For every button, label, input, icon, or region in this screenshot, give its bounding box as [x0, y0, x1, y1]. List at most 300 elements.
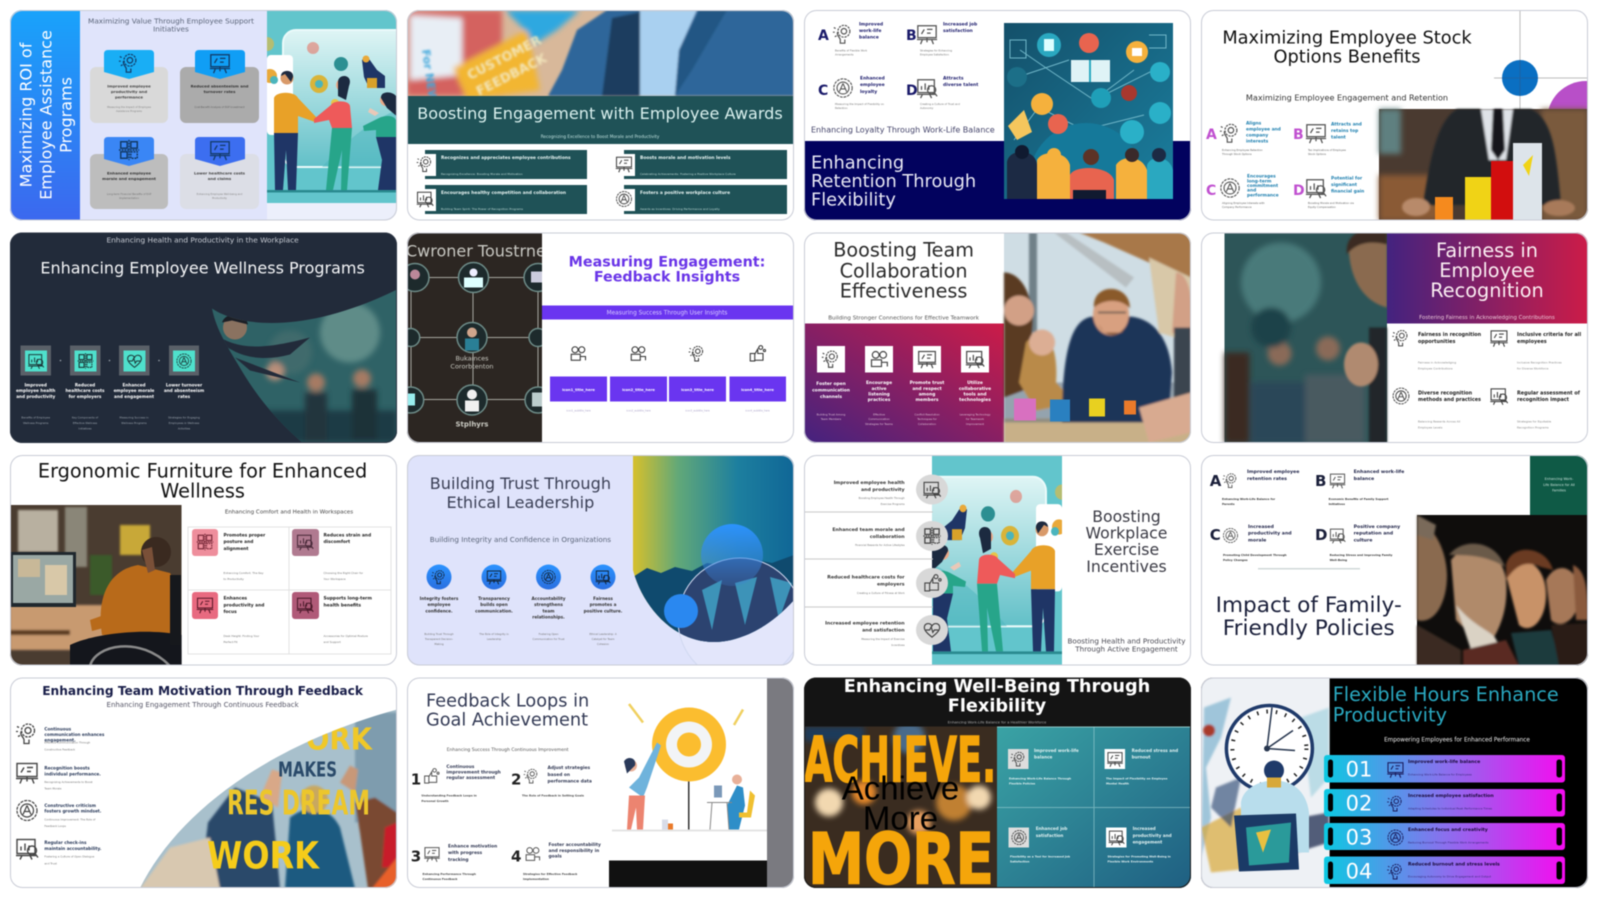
image: customer journey network: Cwroner Toustrney [406, 242, 555, 260]
row 02 [1324, 789, 1565, 816]
item 2: Choosing the Right Chair for [324, 571, 364, 575]
item 3: Enhances [224, 596, 247, 602]
item A [818, 22, 883, 56]
item 3: and respect [912, 386, 942, 392]
slide 14: Feedback Loops in Goal Achievement [407, 678, 794, 888]
item 2: Recognition boosts [44, 766, 90, 770]
slide 8: Fairness in Employee Recognition [1201, 229, 1588, 444]
item 2: Boosts morale and motivation levels [640, 155, 731, 161]
title: Flexibility [948, 696, 1047, 716]
item D [1315, 524, 1400, 562]
item 1: and productivity [861, 487, 905, 493]
subtitle: Empowering Employees for Enhanced Performance [1384, 738, 1530, 744]
item 2: discomfort [324, 539, 350, 545]
item 2: Mental Health [1106, 782, 1129, 786]
item A: Enhancing Work-Life Balance for [1222, 497, 1276, 501]
item 2: performance data [548, 778, 592, 784]
image: team handshake illustration mirrored [906, 455, 1069, 666]
item 3: Accountability [532, 596, 566, 601]
image: painted clock and worker [1201, 678, 1330, 888]
item A: retention rates [1247, 476, 1287, 482]
item 1 [834, 474, 948, 506]
title: Recognition [1430, 279, 1544, 302]
row 02: Increased employee satisfaction [1408, 793, 1494, 799]
item 4: Employees in Wellness [169, 421, 200, 425]
item 4: Measuring the Impact of Exercise [861, 637, 905, 641]
item 3: Continuous Feedback [422, 877, 458, 881]
item B: talent [1331, 134, 1346, 140]
item 2 [865, 346, 893, 426]
title: Feedback Loops in [426, 692, 589, 712]
item 4: Utilize [967, 380, 983, 386]
slide 3: Enhancing Retention Through Flexibility [804, 10, 1191, 237]
image: customer journey network: Bukaınces [455, 354, 489, 362]
item A: Benefits of Flexible Work [835, 48, 868, 52]
item D: diverse talent [943, 82, 979, 88]
title: Employee [1439, 259, 1535, 282]
rotated title: Employee Assistance [36, 30, 56, 200]
item 1 [192, 529, 266, 581]
item 2: Inclusive criteria for all [1517, 332, 1581, 338]
item D: D [1315, 526, 1327, 544]
item 3: Feedback Loops [44, 824, 66, 828]
item 4 [616, 185, 787, 214]
image: man in suit with feedback signs: For NEW [419, 49, 439, 103]
title: Ethical Leadership [446, 493, 594, 512]
image: team high-five with motivational wall text: RES DREAM [227, 784, 370, 824]
illustration: target with people [612, 704, 767, 830]
item 2 [16, 764, 101, 790]
item C: loyalty [860, 89, 877, 95]
item 3: Measuring Success in [120, 416, 149, 420]
title: Boosting [1092, 507, 1161, 526]
subtitle: Through Active Engagement [1074, 644, 1178, 654]
slide 13: Enhancing Team Motivation Through Feedback [10, 678, 397, 888]
title: Boosting Team [833, 238, 974, 262]
item D: Reducing Stress and Improving Family [1330, 553, 1392, 557]
image: team handshake illustration [266, 10, 398, 219]
item 4: productivity and [1133, 833, 1172, 838]
item 3: Building Team Spirit: The Power of Recognition Programs [441, 207, 523, 211]
item 1 [16, 346, 55, 425]
item 3: Enhancing Performance Through [422, 872, 476, 876]
item B: B [1293, 127, 1304, 143]
item 4: Recognition Programs [1517, 426, 1549, 430]
item 2 [616, 150, 787, 179]
item 2: Communication [868, 417, 890, 421]
slide 16: Flexible Hours Enhance Productivity [1201, 678, 1588, 888]
image: network of ideas illustration [1003, 22, 1174, 200]
item 1: Enhancing Work-Life Balance Through [1009, 776, 1071, 780]
row 01: 01 [1346, 758, 1372, 782]
separators between items [60, 360, 160, 361]
item D: Positive company [1354, 524, 1400, 530]
item B: retains top [1331, 128, 1358, 134]
image: achieve more poster: Achieve [842, 770, 959, 806]
item 1: improvement through [446, 770, 501, 776]
item 1: 1 [411, 770, 421, 788]
item 2: based on [548, 772, 570, 778]
subtitle: Boosting Health and Productivity [1068, 636, 1186, 646]
title: Effectiveness [840, 280, 967, 302]
item B: balance [1354, 476, 1374, 482]
green tab with subtitle: Life Balance for All [1543, 483, 1575, 487]
item 4: and Trust [44, 862, 57, 866]
title: Measuring Engagement: [569, 254, 765, 270]
item B: Enhanced work-life [1354, 469, 1404, 475]
item 1: confidence. [425, 608, 453, 614]
item 1: Building Trust Through [424, 632, 454, 636]
item C: commitment [1247, 183, 1278, 189]
item 4 [1106, 826, 1172, 864]
item 1: employee health [16, 388, 55, 393]
item A [1206, 120, 1281, 156]
title: Flexible Hours Enhance [1333, 683, 1559, 706]
item 1: Flexible Policies [1009, 782, 1036, 786]
image: man in suit with feedback signs: FEEDBACK [474, 51, 550, 100]
subtitle: Enhancing Loyalty Through Work-Life Balance [811, 126, 995, 134]
item 3: 3 [411, 848, 421, 866]
item C: Encourages [1247, 174, 1276, 180]
item 3: fosters growth mindset. [44, 808, 102, 814]
item 3: team [542, 608, 555, 614]
item 2: listening [868, 392, 890, 398]
item D: Autonomy [920, 106, 934, 110]
item B: Stock Options [1308, 152, 1327, 156]
item 4 [16, 840, 102, 866]
card: reduced absenteeism: Cost-Benefit Analysis of EAP Investment [194, 105, 245, 109]
black footer block [609, 860, 767, 888]
item 3: Collaboration [918, 422, 936, 426]
purple band with subtitle [542, 306, 794, 320]
item 2: Transparency [478, 596, 510, 601]
item 2: burnout [1132, 754, 1150, 760]
item 4: Flexible Work Environments [1108, 860, 1154, 864]
item 3: Employee Levels [1418, 426, 1443, 430]
item 2: Reduced stress and [1132, 748, 1178, 753]
image: worker at monitor in wheelchair [10, 505, 182, 666]
item A: Arrangements [835, 52, 854, 56]
title: Flexibility [811, 190, 896, 210]
item 4: and responsibility in [548, 848, 599, 854]
item B: satisfaction [943, 28, 973, 34]
item 2: Your Workspace [324, 577, 346, 581]
item C: and [1247, 188, 1256, 194]
card: lower healthcare: Lower healthcare costs [194, 170, 246, 176]
row 01 [1324, 755, 1565, 782]
item 1 [1008, 748, 1079, 786]
title: Ergonomic Furniture for Enhanced [38, 460, 367, 482]
item A: work-life [859, 28, 881, 34]
separator lines [804, 512, 933, 607]
item 4: technologies [959, 397, 991, 403]
item A: Aligns [1246, 120, 1262, 126]
item C: long-term [1247, 178, 1272, 184]
item 3 [1393, 388, 1481, 430]
item 2: for employers [69, 394, 102, 399]
item 4: Ethical Leadership: A [589, 632, 617, 636]
item 3: Diverse recognition [1418, 390, 1473, 396]
card: enhanced morale: morale and engagement [102, 176, 156, 181]
slide 6: Measuring Engagement: Feedback Insights [398, 232, 794, 444]
image: team high-five with motivational wall text: ORK [306, 722, 374, 758]
item 2 [65, 346, 105, 430]
item 2: Recognizing Achievements to Boost [44, 780, 93, 784]
item 3: employee morale [114, 388, 155, 393]
item 1: Promotes proper [224, 532, 266, 538]
item B: Attracts and [1331, 122, 1362, 128]
item 4: positive culture. [584, 608, 623, 614]
item 2: Celebrating Achievements: Fostering a Positive Workplace Culture [640, 172, 736, 176]
item 2 [1490, 331, 1581, 370]
item 4: Implementation [523, 877, 549, 881]
row 03: Enhanced focus and creativity [1408, 827, 1488, 833]
item 3: methods and practices [1418, 397, 1481, 403]
item 1 [411, 764, 501, 803]
item 4 [1490, 389, 1581, 430]
slide 9: Ergonomic Furniture for Enhanced Wellness [10, 455, 397, 666]
item 1: Benefits of Employee [21, 416, 50, 420]
title: Boosting Engagement with Employee Awards [417, 104, 783, 123]
item 4 [292, 592, 372, 644]
card: reduced absenteeism: Reduced absenteeism and [191, 84, 249, 88]
item 4: Foster accountability [548, 842, 601, 848]
item 4: Improvement [966, 422, 984, 426]
item 2: Financial Rewards for Active Lifestyles [855, 543, 905, 547]
item 2: The Role of Feedback in Setting Goals [522, 794, 584, 798]
item 1: Understanding Feedback Loops in [421, 794, 477, 798]
card: improved productivity: Improved employee [107, 84, 151, 88]
item 4 [959, 346, 991, 426]
item 3: Flexibility as a Tool for Increased Job [1010, 854, 1070, 858]
item D: Creating a Culture of Trust and [920, 102, 960, 106]
item C: C [818, 83, 828, 99]
item 3: Techniques for [916, 417, 938, 421]
item D: D [906, 83, 918, 99]
item 4: Supports long-term [324, 596, 372, 602]
item C: performance [1247, 192, 1279, 198]
item D: significant [1331, 182, 1357, 188]
item B: Employee Satisfaction [920, 52, 949, 56]
item 3: employers [877, 582, 905, 588]
item 4: collaborative [959, 386, 991, 392]
item 3 [910, 346, 944, 426]
item A: company [1246, 134, 1268, 138]
item 1: Foster open [816, 381, 846, 387]
item 1: alignment [224, 546, 249, 552]
item 1 [417, 150, 587, 179]
item D [1293, 176, 1364, 209]
item 3: icon3_subtitle_here [685, 408, 710, 412]
item 4: Strategies for Equitable [1517, 420, 1551, 424]
item 2: healthcare costs [65, 388, 105, 393]
item 3: Fostering Open [539, 632, 559, 636]
item 1: communication enhances [44, 732, 105, 737]
item D: D [1293, 183, 1305, 199]
decorative circles and cross lines [1494, 10, 1588, 110]
row 03 [1324, 823, 1565, 850]
subtitle: Initiatives [153, 24, 189, 34]
image: customer journey network [398, 232, 555, 444]
item C [818, 76, 885, 110]
navy title band [804, 141, 1191, 221]
item D: Well-Being [1330, 558, 1347, 562]
slide 2: Boosting Engagement with Employee Awards [407, 10, 794, 220]
divider [1258, 568, 1360, 570]
item 3: Reduced healthcare costs for [827, 574, 905, 580]
item 2: active [871, 386, 887, 392]
item 4: rates [178, 394, 191, 399]
item 3: Communication for Trust [533, 637, 564, 641]
item 2: for Diverse Workforce [1517, 366, 1549, 370]
item 3: tracking [448, 857, 469, 863]
image: achieve more poster [804, 722, 997, 900]
item 4: goals [548, 854, 562, 860]
item 4 [584, 564, 623, 646]
item 1: Recognizes and appreciates employee contributions [441, 155, 571, 161]
item 2: individual performance. [44, 772, 101, 776]
gradient panel [804, 324, 1004, 444]
item 2 [475, 564, 513, 641]
item A: A [1206, 127, 1217, 143]
subtitle: Building Integrity and Confidence in Organizations [430, 535, 611, 544]
item 1: Improved [24, 382, 47, 388]
item 4: Lower turnover [166, 382, 203, 388]
title: Exercise [1094, 540, 1159, 559]
item 1 [550, 347, 607, 412]
item 3: Creating a Culture of Fitness at Work [857, 591, 905, 595]
item 1 [1392, 330, 1482, 370]
benefit grid [188, 527, 391, 654]
slide 5: Enhancing Employee Wellness Programs [10, 232, 397, 444]
green tab with subtitle [1530, 455, 1588, 515]
item 1: communication [812, 388, 850, 394]
title: Impact of Family- [1216, 593, 1402, 618]
item 2: Initiatives [78, 426, 92, 430]
item 1: Team Members [820, 417, 842, 421]
item 2: Effective Wellness [73, 421, 98, 425]
item 2 [610, 347, 667, 412]
item A: employee and [1246, 126, 1281, 132]
item B [1293, 122, 1362, 156]
slide 12: Impact of Family-Friendly Policies [1201, 455, 1588, 666]
item 3: Perfect Fit [224, 640, 238, 644]
item B: Tax Implications of Employee [1308, 148, 1346, 152]
image: customer journey network: Stplhyrs [456, 420, 488, 428]
image: team collaborating around table [1004, 232, 1192, 444]
image: achieve more poster: ACHIEVE. [804, 724, 996, 796]
item 1: Integrity fosters [420, 596, 459, 601]
item 4: Catalyst for Team [592, 637, 615, 641]
title: Workplace [1086, 524, 1167, 542]
item B: B [1315, 472, 1326, 490]
item 4: Strategies for Promoting Well-Being in [1108, 854, 1171, 858]
item B: B [906, 28, 917, 44]
item 3: Desk Height: Finding Your [224, 634, 260, 638]
subtitle: Fostering Fairness in Acknowledging Contributions [1419, 315, 1555, 321]
item 1: Fairness in Acknowledging [1418, 360, 1456, 364]
row 01: Improved work-life balance [1408, 759, 1480, 765]
title: Goal Achievement [426, 710, 588, 730]
item C: C [1210, 526, 1221, 544]
image: swoosh-shaped team photo [200, 282, 397, 444]
row 01: Enhancing Work-Life Balance for Employees [1408, 772, 1472, 776]
item D [906, 76, 979, 110]
item 1: icon1_subtitle_here [566, 408, 591, 412]
item 3: productivity and [224, 602, 264, 608]
item 3: strengthens [534, 602, 563, 607]
item 4: health benefits [324, 602, 361, 608]
item 3: members [915, 397, 939, 403]
item 3: Promote trust [910, 380, 944, 386]
item 2: Reduces strain and [324, 532, 371, 538]
item 3 [669, 346, 726, 412]
item 2 [1105, 748, 1178, 786]
item 1: Building Trust Among [817, 412, 846, 416]
item D: Equity Compensation [1308, 205, 1336, 209]
item 1 [16, 724, 105, 752]
item A: interests [1246, 138, 1269, 144]
item 1: channels [820, 394, 842, 400]
item 3: Wellness Programs [121, 421, 147, 425]
item C: productivity and [1248, 530, 1292, 536]
item 1 [420, 564, 459, 646]
item C: Policy Changes [1223, 558, 1248, 562]
card: improved productivity: productivity and [111, 89, 147, 94]
item 1: Transparent Decision- [425, 637, 453, 641]
image: achieve more poster: More [863, 800, 938, 836]
item 1: regular assessment [446, 775, 495, 781]
item 4: icon4_subtitle_here [745, 408, 770, 412]
item 3: Satisfaction [1010, 860, 1029, 864]
card: lower healthcare [180, 137, 259, 209]
item 4 [730, 346, 786, 412]
item 2 [832, 521, 948, 551]
item B [1315, 469, 1404, 506]
row 04: 04 [1346, 860, 1372, 884]
item 4: for Teamwork [966, 417, 985, 421]
item 1: to Productivity [224, 577, 244, 581]
item 4: Strategies for Engaging [168, 416, 200, 420]
item 2: practices [868, 397, 891, 403]
row 04 [1324, 856, 1565, 884]
item 3: with progress [448, 850, 483, 856]
subtitle: Maximizing Value Through Employee Support [88, 16, 254, 26]
item 4 [164, 346, 205, 430]
row 04: Encouraging Autonomy to Drive Engagement and Output [1408, 874, 1492, 878]
title: Enhancing Team Motivation Through Feedback [42, 684, 364, 698]
card: improved productivity [90, 50, 168, 123]
item 1: Wellness Programs [23, 421, 49, 425]
item 3: focus [224, 609, 237, 615]
card: enhanced morale: Implementation [119, 196, 139, 200]
rotated title: Maximizing ROI of [16, 42, 36, 187]
card: enhanced morale: Long-term Financial Benefits of EAP [107, 192, 152, 196]
item 2: Effective [873, 412, 885, 416]
title: Building Trust Through [430, 474, 611, 493]
item D: reputation and [1354, 530, 1393, 536]
subtitle: Enhancing Success Through Continuous Improvement [447, 747, 569, 753]
item 2: builds open [480, 602, 508, 607]
image: team high-five with motivational wall text: WORK [207, 834, 320, 878]
title: Retention Through [811, 171, 976, 192]
image: customer journey network: Cororbtenton [450, 362, 494, 370]
item 3: and engagement [114, 394, 154, 399]
item A: Through Stock Options [1222, 152, 1252, 156]
item 2: communication. [475, 608, 513, 614]
item 2: Inclusive Recognition Practices [1517, 360, 1562, 364]
title: Collaboration [840, 260, 968, 282]
